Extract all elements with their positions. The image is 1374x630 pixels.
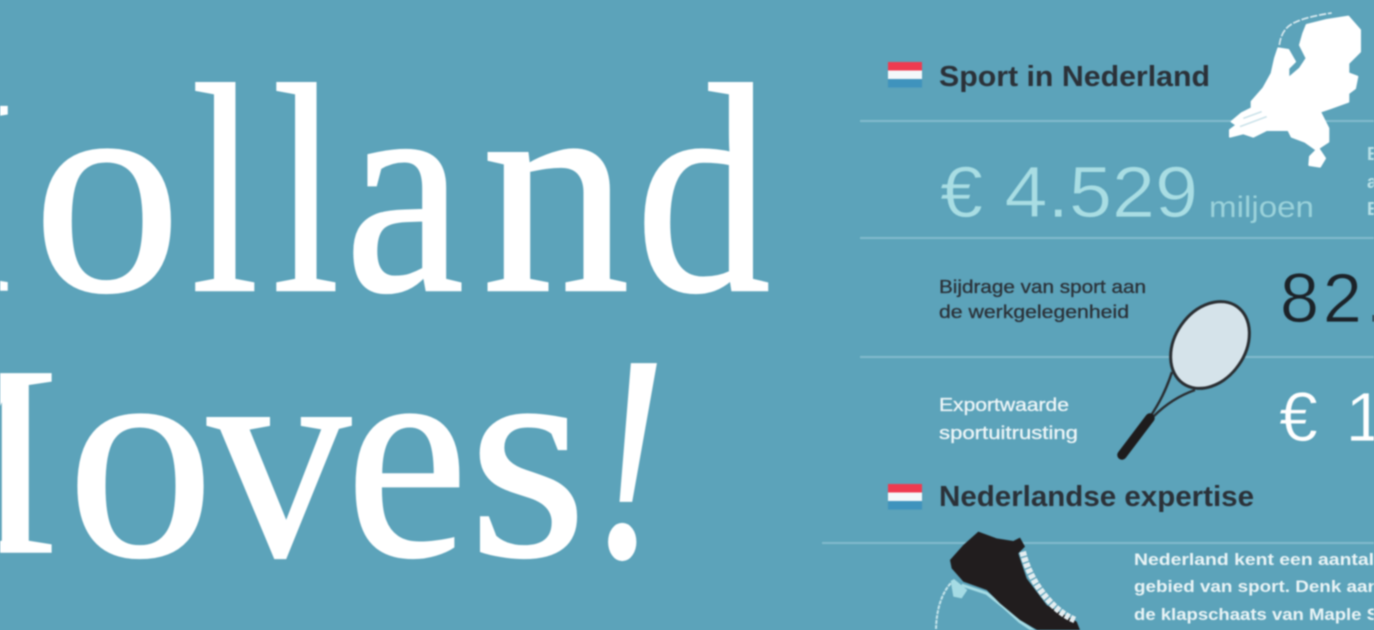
text block: Nederlandse expertise intro: gebied van sport. Denk aan (1134, 577, 1374, 596)
title line 2: e (346, 290, 468, 620)
heading: Sport in Nederland: Sport in Nederland (939, 61, 1210, 93)
label: Exportwaarde sportuitrusting (939, 395, 1078, 443)
title line 1 (0, 25, 770, 355)
stat: € 4.529 miljoen: € 4.529 (940, 153, 1198, 233)
label: Bijdrage van sport aan de werkgelegenheid: de werkgelegenheid (939, 302, 1129, 322)
stat: € 4.529 miljoen (940, 153, 1314, 233)
title line 2: s (468, 291, 587, 620)
title line 1: a (345, 25, 464, 355)
icon: Dutch flag (888, 62, 922, 88)
divider lines (822, 121, 1374, 543)
title: Holland Moves! (0, 25, 770, 620)
label: Bijdrage van sport aan de werkgelegenheid: Bijdrage van sport aan (939, 277, 1146, 297)
icon: Dutch flag (888, 484, 922, 510)
title line 2: ! (593, 298, 664, 619)
icon: tennis racket (1122, 286, 1266, 455)
panel: Sport in Nederland (888, 13, 1374, 456)
title line 1: l (191, 25, 258, 355)
icon: klapschaats skate (936, 532, 1081, 630)
title line 1: o (33, 26, 181, 355)
title line 1: l (272, 25, 339, 355)
heading: Nederlandse expertise: Nederlandse expertise (939, 481, 1254, 513)
title line 2: o (68, 289, 214, 620)
title line 1: d (636, 26, 770, 355)
title line 1: n (482, 26, 630, 355)
text block: Nederlandse expertise intro: Nederland kent een aantal (1134, 550, 1374, 569)
label: Exportwaarde sportuitrusting: sportuitrusting (939, 423, 1078, 443)
text block: Nederlandse expertise intro: de klapschaats van Maple S (1134, 605, 1374, 624)
icon: map of the Netherlands (1230, 13, 1360, 167)
panel: Nederlandse expertise (888, 481, 1374, 630)
text block: Nederlandse expertise intro (1134, 550, 1374, 624)
label: Exportwaarde sportuitrusting: Exportwaarde (939, 395, 1069, 415)
title line 2: v (208, 291, 351, 620)
label: Bijdrage van sport aan de werkgelegenheid (939, 277, 1146, 322)
stat: € 4.529 miljoen: miljoen (1209, 191, 1314, 224)
clipped side text (1367, 144, 1374, 219)
title line 2 (0, 289, 664, 620)
